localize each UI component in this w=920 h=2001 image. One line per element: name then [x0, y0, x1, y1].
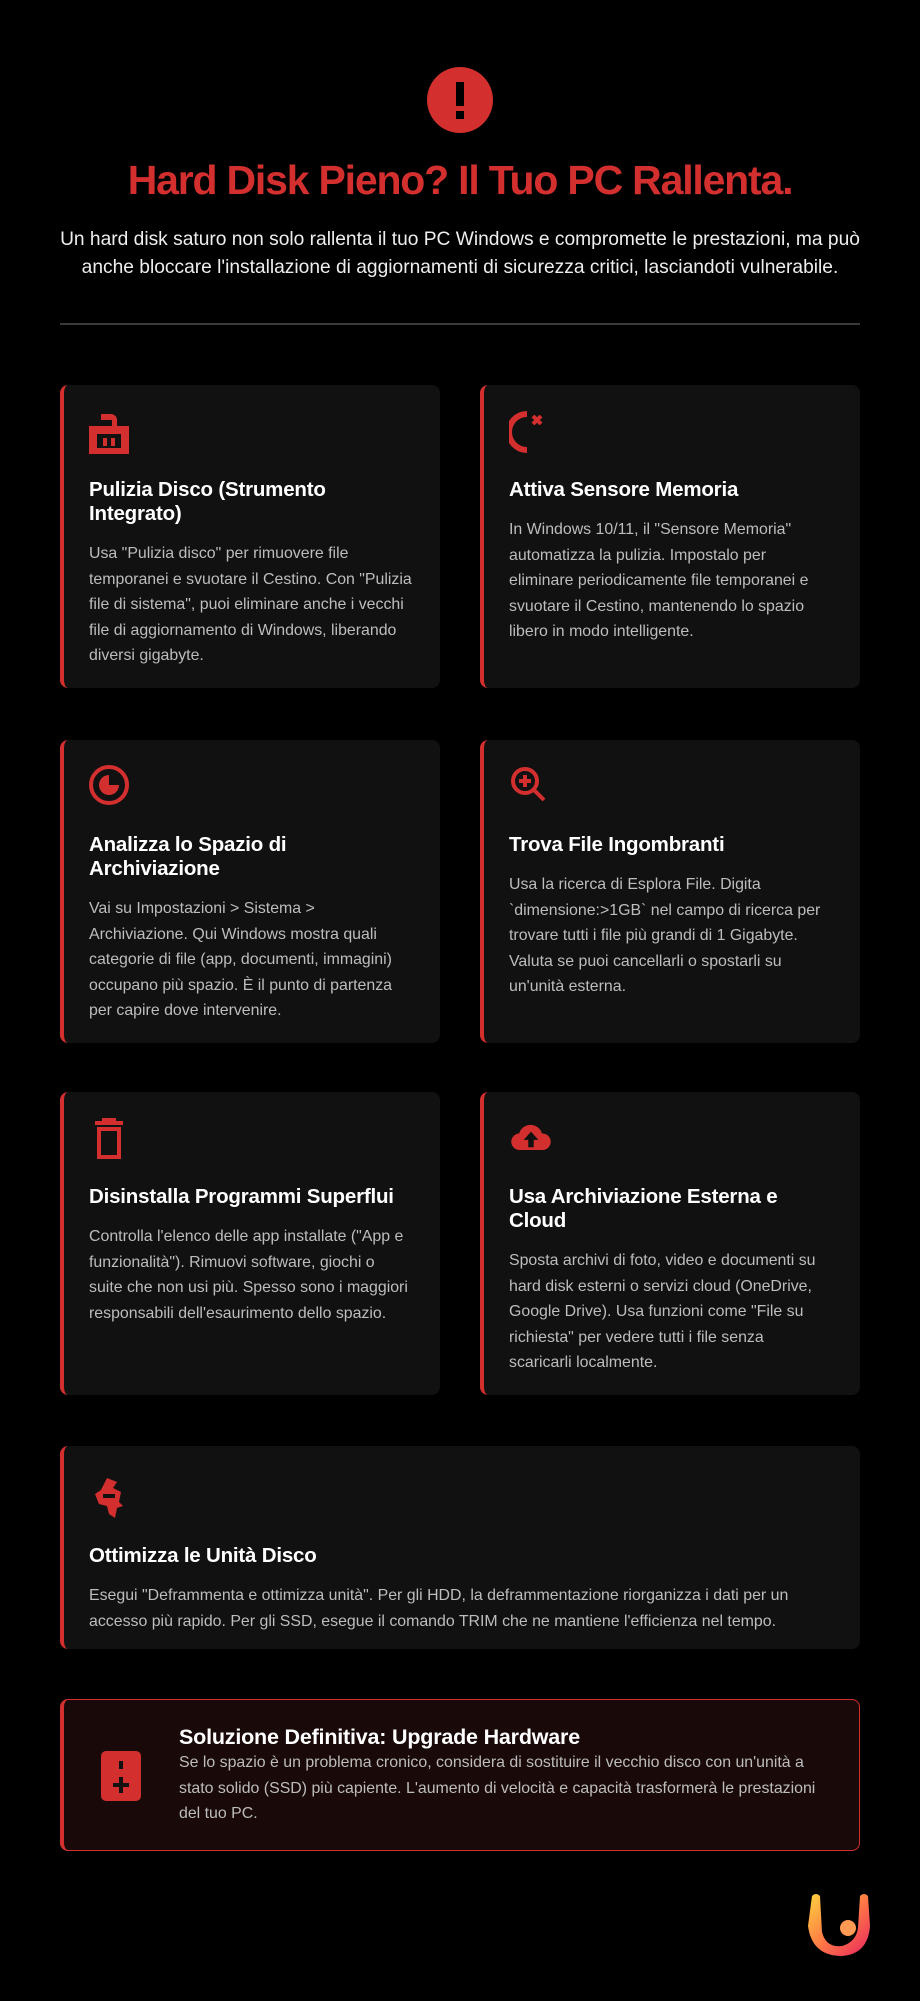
body: Vai su Impostazioni > Sistema >	[89, 900, 315, 917]
body: file di sistema", puoi eliminare anche i vecchi	[89, 596, 404, 613]
panel: file ingombranti	[480, 740, 860, 1043]
icon: trash	[95, 1118, 123, 1159]
heading: Disinstalla Programmi Superflui	[89, 1185, 394, 1208]
body: suite che non usi più. Spesso sono i maggiori	[89, 1279, 408, 1296]
heading: Analizza lo Spazio di	[89, 833, 286, 856]
subtitle: anche bloccare l'installazione di aggiornamenti di sicurezza critici, lasciandoti vulnerabile.	[82, 257, 838, 278]
body: Usa "Pulizia disco" per rimuovere file	[89, 545, 348, 562]
callout: upgrade hardware	[60, 1699, 860, 1851]
body: categorie di file (app, documenti, immagini)	[89, 951, 392, 968]
body: richiesta" per vedere tutti i file senza	[509, 1328, 764, 1346]
icon: pie chart	[89, 765, 129, 805]
panel: disinstalla programmi	[60, 1092, 440, 1395]
body: Valuta se puoi cancellarli o spostarli su	[509, 952, 782, 970]
body: Controlla l'elenco delle app installate ("App e	[89, 1228, 403, 1245]
body	[509, 521, 808, 640]
body: accesso più rapido. Per gli SSD, esegue il comando TRIM che ne mantiene l'efficienza nel tempo.	[89, 1612, 776, 1630]
subtitle: Un hard disk saturo non solo rallenta il tuo PC Windows e compromette le prestazioni, ma può	[60, 229, 860, 250]
heading: Attiva Sensore Memoria	[509, 478, 738, 501]
body: file di aggiornamento di Windows, liberando	[89, 622, 396, 638]
body: responsabili dell'esaurimento dello spazio.	[89, 1304, 386, 1322]
body: temporanei e svuotare il Cestino. Con "Pulizia	[89, 570, 412, 588]
body: `dimensione:>1GB` nel campo di ricerca per	[509, 902, 820, 918]
icon: ssd	[101, 1751, 141, 1801]
panel: pulizia disco	[60, 385, 440, 688]
body: stato solido (SSD) più capiente. L'aumento di velocità e capacità trasformerà le prestazioni	[179, 1780, 815, 1796]
body: eliminare periodicamente file temporanei e	[509, 572, 808, 589]
heading: Cloud	[509, 1209, 566, 1232]
heading: Archiviazione	[89, 857, 220, 880]
icon: alert circle	[427, 67, 493, 133]
body: un'unità esterna.	[509, 978, 626, 995]
body: scaricarli localmente.	[509, 1354, 657, 1371]
body: hard disk esterni o servizi cloud (OneDrive,	[509, 1278, 812, 1294]
icon: defrag	[95, 1478, 123, 1518]
body: Esegui "Deframmenta e ottimizza unità". Per gli HDD, la deframmentazione riorganizza i dati per un	[89, 1587, 788, 1604]
body: Usa la ricerca di Esplora File. Digita	[509, 876, 761, 893]
body: In Windows 10/11, il "Sensore Memoria"	[509, 521, 791, 538]
panel: sensore memoria	[480, 385, 860, 688]
body: diversi gigabyte.	[89, 647, 204, 664]
heading	[89, 478, 326, 525]
body: per capire dove intervenire.	[89, 1002, 282, 1019]
heading: Soluzione Definitiva: Upgrade Hardware	[179, 1725, 580, 1749]
heading: Usa Archiviazione Esterna e	[509, 1185, 777, 1208]
body: Google Drive). Usa funzioni come "File su	[509, 1303, 803, 1320]
body	[509, 876, 820, 995]
body: libero in modo intelligente.	[509, 623, 694, 640]
panel: analizza spazio	[60, 740, 440, 1043]
body: funzionalità"). Rimuovi software, giochi o	[89, 1254, 375, 1270]
heading: Integrato)	[89, 502, 182, 525]
body: del tuo PC.	[179, 1805, 258, 1822]
body: svuotare il Cestino, mantenendo lo spazio	[509, 598, 804, 614]
body	[89, 1228, 408, 1322]
subtitle	[60, 229, 860, 278]
heading	[89, 833, 286, 880]
icon: lock	[89, 414, 129, 454]
body	[509, 1252, 816, 1371]
body	[89, 1587, 788, 1630]
body: automatizza la pulizia. Impostalo per	[509, 546, 766, 564]
body	[179, 1754, 815, 1822]
body	[89, 900, 392, 1019]
body: Se lo spazio è un problema cronico, considera di sostituire il vecchio disco con un'unità a	[179, 1754, 804, 1771]
heading: Ottimizza le Unità Disco	[89, 1544, 317, 1567]
title: Hard Disk Pieno? Il Tuo PC Rallenta.	[128, 157, 792, 203]
panel: ottimizza unità	[60, 1446, 860, 1649]
body	[89, 545, 412, 664]
body: Archiviazione. Qui Windows mostra quali	[89, 926, 377, 942]
heading: Trova File Ingombranti	[509, 833, 724, 856]
body: trovare tutti i file più grandi di 1 Gigabyte.	[509, 927, 798, 944]
heading: Pulizia Disco (Strumento	[89, 478, 326, 501]
icon: magnifier	[511, 767, 546, 802]
icon: logo	[808, 1894, 870, 1956]
body: occupano più spazio. È il punto di partenza	[89, 976, 392, 994]
icon: gauge	[509, 411, 542, 453]
icon: cloud upload	[511, 1124, 551, 1150]
body: Sposta archivi di foto, video e documenti su	[509, 1252, 816, 1269]
heading	[509, 1185, 777, 1232]
panel: archiviazione esterna	[480, 1092, 860, 1395]
